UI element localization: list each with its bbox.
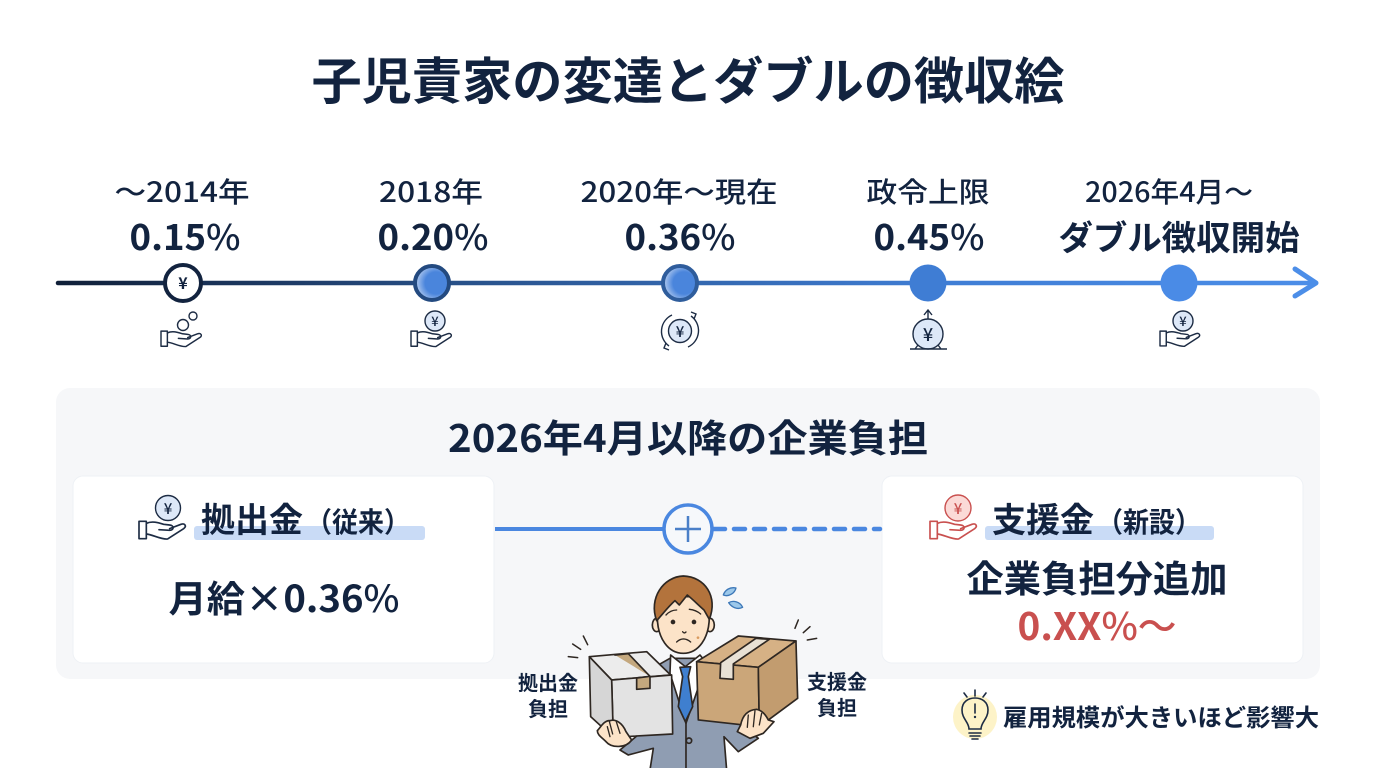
hands bbox=[597, 709, 774, 746]
panel heading: 2026年4月以降の企業負担 bbox=[448, 408, 928, 463]
card: support levy: （新設） bbox=[1097, 501, 1201, 541]
timeline axis arrow bbox=[58, 269, 1316, 296]
milestone: cabinet order cap: 0.45% bbox=[874, 210, 984, 261]
sweat drops bbox=[723, 588, 743, 608]
milestone: 2026 double collection: 2026年4月〜 bbox=[1085, 171, 1253, 211]
label: support levy burden: 支援金 bbox=[807, 666, 867, 695]
icon: light bulb bbox=[953, 690, 997, 739]
suit bbox=[620, 658, 758, 768]
milestone: 2020: ¥ bbox=[676, 321, 685, 342]
label: support levy burden: 負担 bbox=[817, 692, 857, 721]
milestone: 2018: 0.20% bbox=[378, 210, 488, 261]
milestone: 2026 double collection: ¥ bbox=[1179, 311, 1187, 330]
milestone: 2018: 2018年 bbox=[379, 171, 483, 211]
milestone: cabinet order cap: ¥ bbox=[923, 321, 933, 347]
callout: impact by employer size: 雇用規模が大きいほど影響大 bbox=[1003, 698, 1319, 733]
card: contribution bbox=[73, 476, 494, 663]
label: support levy burden bbox=[807, 666, 867, 721]
box: brown support levy bbox=[697, 636, 798, 727]
card: support levy: 企業負担分追加 bbox=[966, 549, 1228, 603]
milestone: 2018 bbox=[378, 171, 488, 347]
label: contribution burden: 負担 bbox=[528, 693, 568, 722]
milestone: cabinet order cap bbox=[866, 171, 990, 349]
card: support levy: 0.XX%〜 bbox=[1018, 596, 1176, 651]
milestone: 2026 double collection bbox=[1058, 171, 1300, 346]
illustration: worried businessman holding two boxes bbox=[568, 576, 817, 768]
milestone: cabinet order cap: 政令上限 bbox=[866, 171, 990, 211]
card: support levy: ¥ bbox=[954, 498, 963, 519]
milestone: 2014 bbox=[114, 171, 250, 347]
card: contribution: ¥ bbox=[164, 498, 173, 519]
card: contribution: 拠出金 bbox=[201, 493, 303, 542]
milestone: 2020 bbox=[580, 171, 778, 350]
connector with plus sign bbox=[495, 505, 880, 553]
milestone: 2020: 2020年〜現在 bbox=[580, 171, 778, 211]
title: 子児責家の変達とダブルの徴収絵 bbox=[312, 42, 1064, 114]
card: contribution: （従来） bbox=[306, 501, 410, 541]
label: contribution burden bbox=[518, 667, 578, 722]
card: contribution: 月給×0.36% bbox=[168, 569, 399, 623]
shirt and tie bbox=[670, 655, 707, 768]
milestone: 2014: 0.15% bbox=[130, 210, 240, 261]
box: grey contribution bbox=[589, 652, 673, 737]
panel: corporate burden bbox=[56, 388, 1320, 679]
milestone: 2018: ¥ bbox=[431, 311, 439, 330]
milestone: 2020: 0.36% bbox=[624, 210, 736, 261]
milestone: 2026 double collection: ダブル徴収開始 bbox=[1058, 211, 1300, 260]
milestone: 2014: 〜2014年 bbox=[114, 171, 250, 211]
milestone: 2014: ¥ bbox=[178, 270, 188, 294]
label: contribution burden: 拠出金 bbox=[518, 667, 578, 696]
head bbox=[652, 576, 714, 653]
card: support levy: 支援金 bbox=[992, 493, 1094, 542]
timeline bbox=[58, 171, 1316, 350]
impact marks bbox=[568, 620, 817, 658]
card: support levy bbox=[882, 476, 1303, 663]
